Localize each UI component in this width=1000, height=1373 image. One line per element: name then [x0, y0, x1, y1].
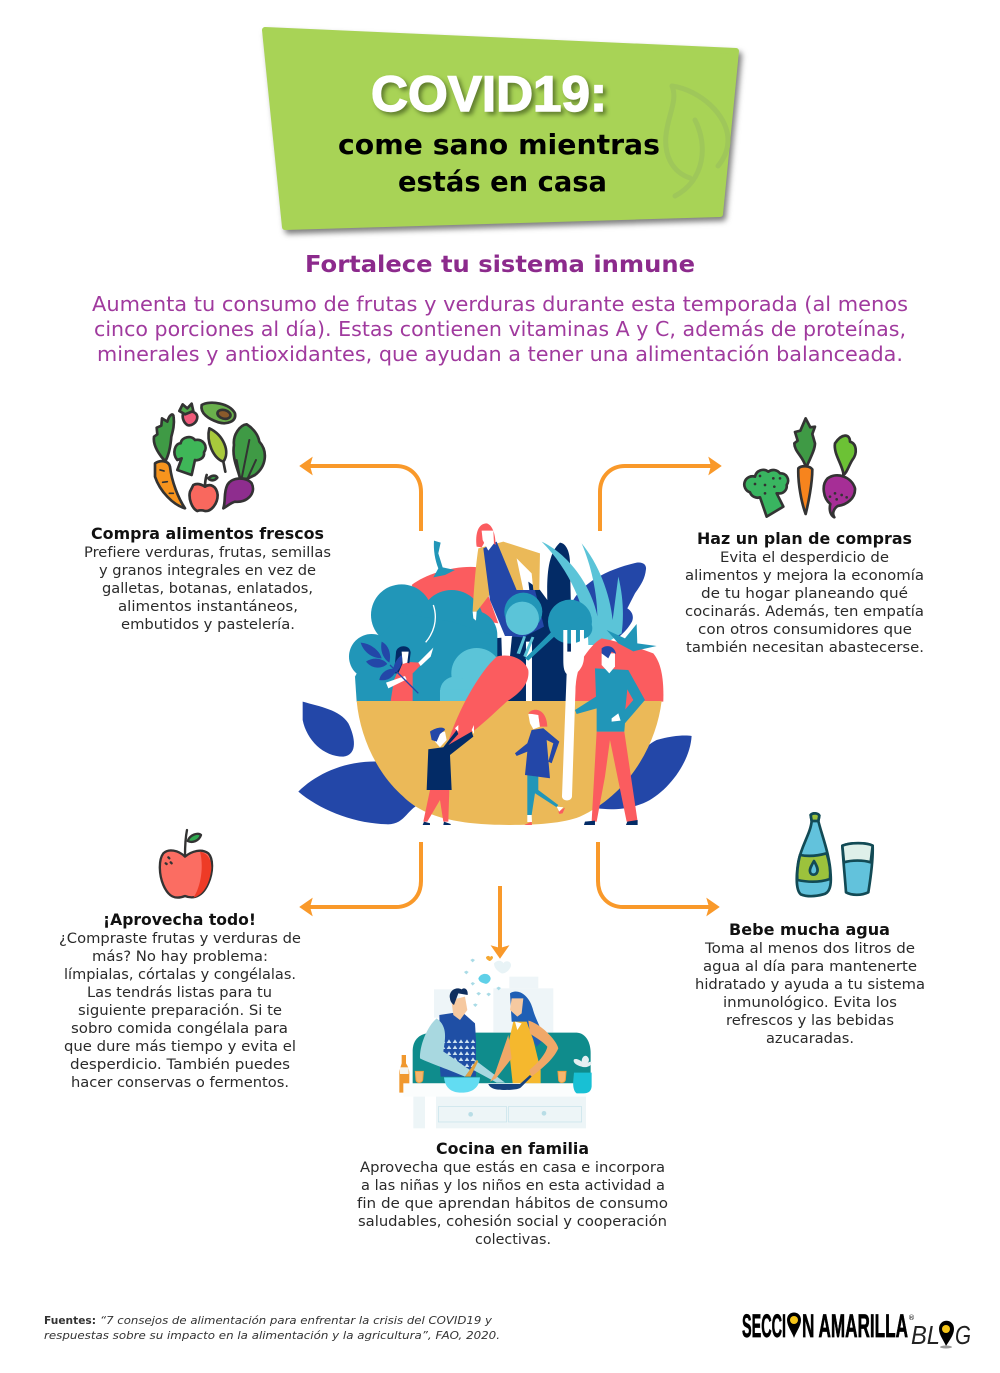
body [357, 1160, 668, 1248]
arrow: to shopping plan [600, 459, 720, 531]
logo: Sección Amarilla Blog: N AMARILLA [802, 1308, 908, 1344]
heading: Haz un plan de compras [697, 529, 912, 548]
logo: Sección Amarilla Blog: ® [908, 1314, 915, 1322]
arrow: to family cooking [493, 886, 507, 957]
leaves behind the bowl [298, 562, 692, 824]
body [685, 550, 924, 656]
body: alimentos y mejora la economía [685, 568, 924, 584]
body: de tu hogar planeando qué [701, 586, 908, 602]
woman on top [473, 523, 544, 657]
body: Aprovecha que estás en casa e incorpora [360, 1160, 665, 1176]
carrot [447, 655, 528, 747]
footer sources: Fuentes: [44, 1315, 96, 1327]
body: hidratado y ayuda a tu sistema [695, 977, 925, 993]
body: límpialas, córtalas y congélalas. [64, 967, 296, 983]
body: galletas, botanas, enlatados, [102, 581, 313, 597]
tomato right [575, 638, 663, 702]
banner shape [265, 30, 736, 227]
bottle and glasses [399, 1055, 567, 1093]
footer sources [44, 1315, 500, 1342]
intro paragraph: minerales y antioxidantes, que ayudan a tener una alimentación balanceada. [97, 342, 903, 366]
body: cocinarás. Además, ten empatía [685, 604, 924, 620]
logo: Sección Amarilla Blog: SECCI [742, 1308, 786, 1344]
small girl with branch [361, 642, 433, 701]
body: azucaradas. [766, 1031, 854, 1047]
man [575, 646, 645, 825]
body: saludables, cohesión social y cooperación [358, 1214, 667, 1230]
body: refrescos y las bebidas [726, 1013, 894, 1029]
intro paragraph: Aumenta tu consumo de frutas y verduras durante esta temporada (al menos [92, 292, 908, 316]
heading: ¡Aprovecha todo! [103, 910, 256, 929]
body: también necesitan abastecerse. [686, 640, 924, 656]
arrow: to leftovers [301, 842, 421, 914]
footer sources: respuestas sobre su impacto en la alimentación y la agricultura”, FAO, 2020. [44, 1330, 500, 1342]
footer sources: “7 consejos de alimentación para enfrentar la crisis del COVID19 y [100, 1315, 493, 1327]
child with carrot [423, 725, 474, 825]
plant [573, 1056, 592, 1093]
teal bush [349, 584, 497, 702]
title: COVID19: COVID19: [371, 66, 607, 122]
body: desperdicio. También puedes [70, 1057, 290, 1073]
light leaves [542, 542, 623, 645]
body: sobro comida congélala para [71, 1021, 288, 1037]
body: inmunológico. Evita los [723, 995, 897, 1011]
body: ¿Compraste frutas y verduras de [59, 931, 301, 947]
logo: Sección Amarilla Blog [742, 1308, 971, 1350]
icon: broccoli, carrot and beet [744, 418, 856, 517]
body [59, 931, 301, 1091]
heading: Compra alimentos frescos [91, 524, 324, 543]
man [420, 988, 505, 1083]
body: a las niñas y los niños en esta actividad a [361, 1178, 665, 1194]
body: con otros consumidores que [698, 622, 912, 638]
girl [515, 710, 565, 825]
body [695, 941, 925, 1047]
text: Aprovecha todo [59, 910, 301, 1091]
subtitle: come sano mientras [338, 128, 660, 161]
intro paragraph: cinco porciones al día). Estas contienen vitaminas A y C, además de proteínas, [94, 317, 906, 341]
body [84, 545, 331, 633]
bowl [357, 701, 662, 825]
body: que dure más tiempo y evita el [64, 1039, 296, 1055]
logo: Sección Amarilla Blog: BL [911, 1320, 940, 1350]
heading: Bebe mucha agua [729, 920, 890, 939]
illustration: couple cooking [399, 956, 592, 1128]
subtitle: estás en casa [398, 165, 607, 198]
fork [562, 630, 584, 800]
body: siguiente preparación. Si te [78, 1003, 282, 1019]
intro paragraph [92, 292, 908, 366]
broccoli [504, 593, 592, 702]
icon: blog pin [939, 1321, 954, 1348]
body: Evita el desperdicio de [720, 550, 889, 566]
icon: apple [160, 830, 212, 898]
icon: map pin [787, 1312, 801, 1338]
body: colectivas. [475, 1232, 551, 1248]
heading: Cocina en familia [436, 1139, 589, 1158]
counter [403, 1083, 587, 1128]
body: Las tendrás listas para tu [87, 985, 272, 1001]
icon: fruits and vegetables circle [154, 403, 265, 511]
body: agua al día para mantenerte [703, 959, 917, 975]
sofa [413, 1033, 591, 1083]
text: Bebe mucha agua [695, 920, 925, 1047]
text: Cocina en familia [357, 1139, 668, 1248]
body: más? No hay problema: [92, 949, 268, 965]
arrow: to fresh food [301, 459, 421, 531]
icon: water bottle and glass [797, 813, 873, 896]
tomato back [412, 567, 498, 623]
arrow: to water [598, 842, 718, 914]
logo: Sección Amarilla Blog: G [955, 1320, 971, 1350]
body: alimentos instantáneos, [118, 599, 298, 615]
woman [490, 991, 558, 1083]
aubergine [490, 543, 573, 702]
text: Haz un plan de compras [685, 529, 924, 656]
bowl and pan [444, 1075, 532, 1093]
body: y granos integrales en vez de [99, 563, 316, 579]
body: Prefiere verduras, frutas, semillas [84, 545, 331, 561]
body: embutidos y pastelería. [121, 617, 295, 633]
body: Toma al menos dos litros de [704, 941, 915, 957]
light bush [440, 648, 503, 707]
heading: Fortalece tu sistema inmune: Fortalece tu sistema inmune [305, 252, 695, 278]
central illustration: salad bowl with people [298, 523, 692, 825]
title banner [265, 30, 736, 227]
text: Compra alimentos frescos [84, 524, 331, 633]
icon: leaf watermark [666, 86, 728, 196]
hearts [464, 956, 511, 1007]
subtitle [338, 128, 660, 198]
body: fin de que aprendan hábitos de consumo [357, 1196, 668, 1212]
body: hacer conservas o fermentos. [71, 1075, 289, 1091]
buildings [434, 977, 553, 1032]
